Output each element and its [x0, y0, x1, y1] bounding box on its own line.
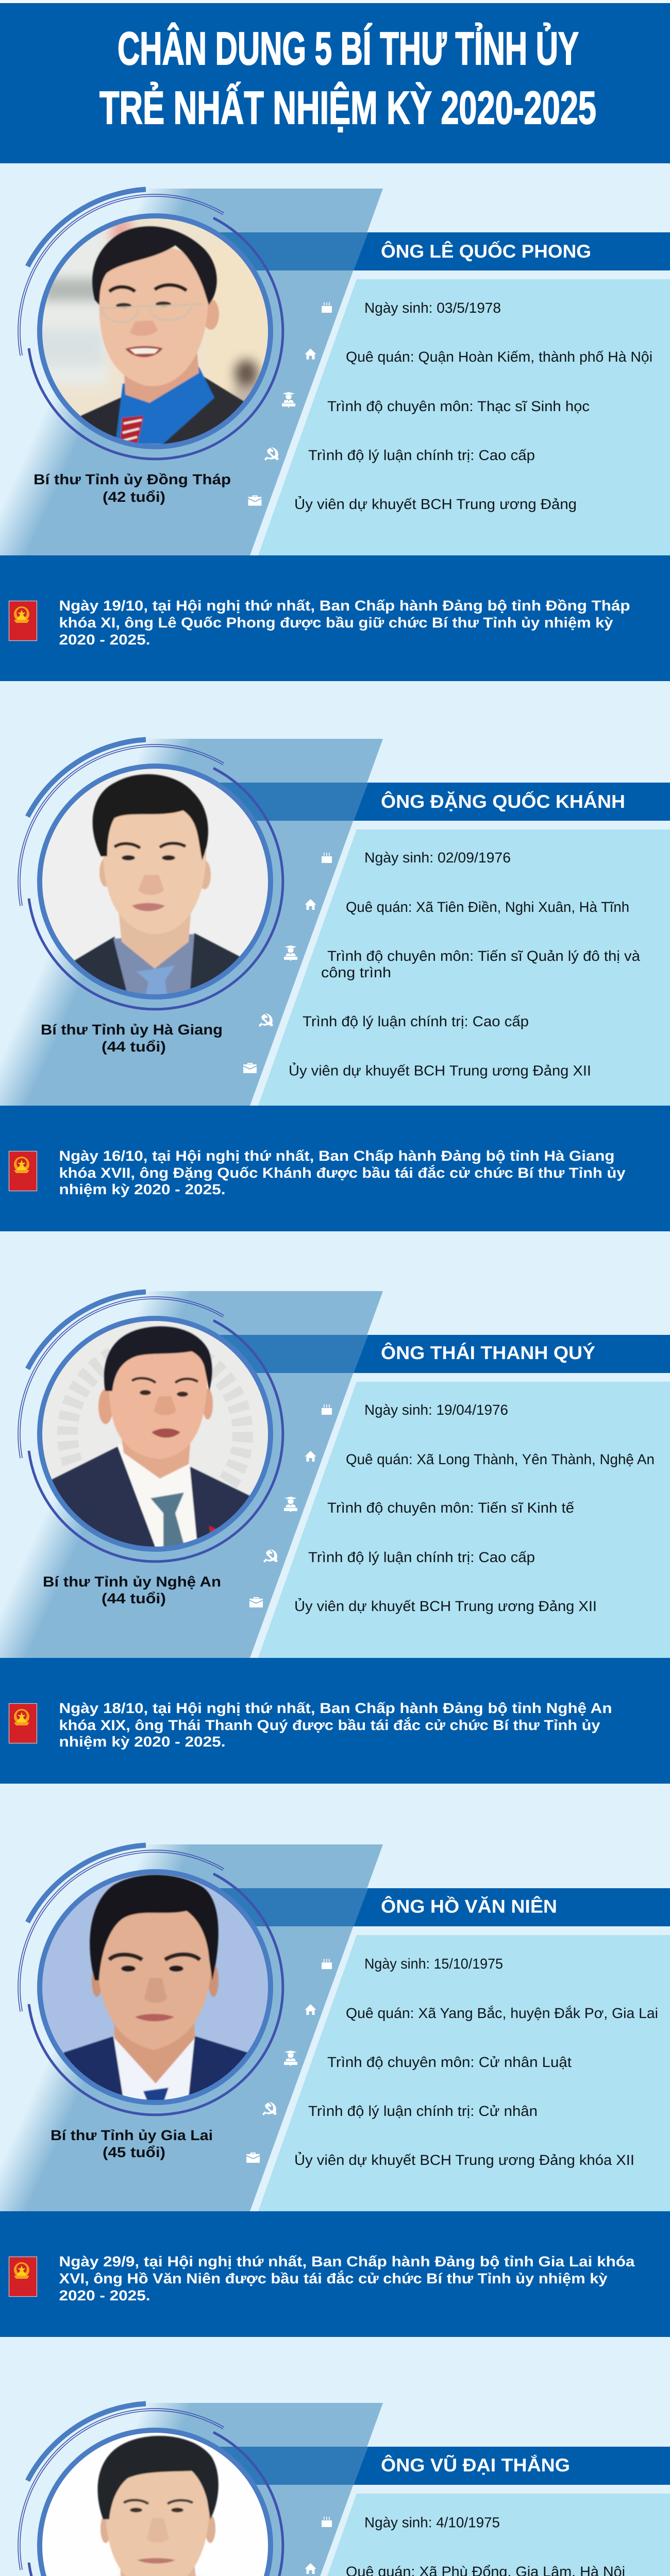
photo ring: [40, 1318, 271, 1549]
icon: briefcase: [246, 2153, 260, 2163]
portrait: Hồ Văn Niên: [41, 1872, 271, 2102]
section 2: Đặng Quốc Khánh: [0, 739, 670, 1231]
name: ÔNG VŨ ĐẠI THẮNG: [381, 2454, 570, 2476]
info panel: [258, 1382, 670, 1658]
note text: khóa XI, ông Lê Quốc Phong được bầu giữ chức Bí thư Tỉnh ủy nhiệm kỳ: [59, 615, 613, 631]
note text: nhiệm kỳ 2020 - 2025.: [59, 1181, 226, 1197]
name band: [354, 2447, 670, 2485]
icon: house: [305, 348, 316, 360]
name band overlay: [180, 232, 368, 270]
row: education: Trình độ chuyên môn: Tiến sĩ Quản lý đô thị và: [327, 948, 640, 964]
row: hometown: Quê quán: Xã Yang Bắc, huyện Đắk Pơ, Gia Lai: [346, 2005, 658, 2021]
icon: house: [305, 899, 316, 910]
decorative arcs: [18, 740, 283, 1009]
background trapezoid: [0, 1844, 383, 2211]
background trapezoid: [0, 739, 383, 1106]
note text: [59, 2253, 635, 2303]
portrait: Lê Quốc Phong: [36, 216, 271, 446]
row: birth date: Ngày sinh: 02/09/1976: [364, 850, 511, 866]
name band overlay: [180, 1335, 368, 1373]
caption: (44 tuổi): [102, 1590, 166, 1606]
section 3: Thái Thanh Quý: [0, 1291, 670, 1784]
name band: [354, 1335, 670, 1373]
row: education: [321, 948, 640, 980]
icon: cake: [322, 853, 332, 863]
row: hometown: Quê quán: Xã Long Thành, Yên Thành, Nghệ An: [346, 1451, 655, 1467]
decorative arcs: [18, 2404, 283, 2576]
background trapezoid: [0, 189, 383, 555]
name: ÔNG LÊ QUỐC PHONG: [381, 241, 591, 262]
row: birth date: Ngày sinh: 03/5/1978: [364, 300, 501, 316]
icon: cake: [322, 1959, 332, 1969]
note text: 2020 - 2025.: [59, 632, 150, 648]
icon: emblem flag: [9, 1151, 37, 1191]
icon: graduate: [284, 945, 297, 961]
row: committee: Ủy viên dự khuyết BCH Trung ương Đảng: [294, 496, 577, 512]
row: political theory: Trình độ lý luận chính trị: Cao cấp: [308, 1549, 535, 1565]
icon: graduate: [284, 1497, 297, 1512]
info panel: [258, 279, 670, 555]
caption: [34, 471, 231, 505]
note band: [0, 2211, 670, 2337]
background trapezoid: [0, 1291, 383, 1658]
caption: Bí thư Tỉnh ủy Đồng Tháp: [34, 471, 231, 487]
section 1: Lê Quốc Phong: [0, 189, 670, 681]
photo ring: [40, 1872, 271, 2103]
icon: house: [305, 2563, 316, 2574]
caption: [41, 1022, 223, 1055]
caption: Bí thư Tỉnh ủy Gia Lai: [51, 2127, 213, 2143]
icon: briefcase: [248, 496, 262, 506]
caption: (42 tuổi): [103, 489, 165, 505]
header band: [0, 0, 670, 163]
caption: (44 tuổi): [102, 1039, 166, 1055]
name: ÔNG HỒ VĂN NIÊN: [381, 1896, 557, 1917]
row: birth date: Ngày sinh: 19/04/1976: [364, 1402, 508, 1418]
row: committee: Ủy viên dự khuyết BCH Trung ương Đảng XII: [294, 1598, 597, 1614]
decorative arcs: [18, 1845, 283, 2115]
row: political theory: Trình độ lý luận chính trị: Cao cấp: [308, 447, 535, 463]
note text: [59, 598, 630, 648]
icon: graduate: [282, 392, 295, 408]
icon: emblem flag: [9, 2257, 37, 2297]
note text: Ngày 29/9, tại Hội nghị thứ nhất, Ban Chấp hành Đảng bộ tỉnh Gia Lai khóa: [59, 2253, 635, 2269]
row: birth date: Ngày sinh: 15/10/1975: [364, 1956, 503, 1972]
name band overlay: [180, 1888, 368, 1926]
icon: hammer and sickle: [259, 1013, 273, 1027]
row: education: Trình độ chuyên môn: Thạc sĩ Sinh học: [327, 398, 590, 414]
note text: XVI, ông Hồ Văn Niên được bầu tái đắc cử chức Bí thư Tỉnh ủy nhiệm kỳ: [59, 2270, 608, 2286]
icon: house: [305, 2004, 316, 2015]
note text: Ngày 18/10, tại Hội nghị thứ nhất, Ban Chấp hành Đảng bộ tỉnh Nghệ An: [59, 1700, 612, 1716]
decorative arcs: [18, 1292, 283, 1562]
photo ring: [40, 216, 271, 447]
name band: [354, 232, 670, 270]
caption: Bí thư Tỉnh ủy Hà Giang: [41, 1022, 223, 1038]
info panel: [258, 1935, 670, 2211]
row: education: công trình: [321, 964, 391, 980]
photo ring: [40, 766, 271, 997]
note band: [0, 1658, 670, 1784]
icon: cake: [322, 2517, 332, 2527]
row: birth date: Ngày sinh: 4/10/1975: [364, 2514, 500, 2531]
row: political theory: Trình độ lý luận chính trị: Cử nhân: [308, 2103, 538, 2119]
name band overlay: [180, 783, 368, 821]
row: education: Trình độ chuyên môn: Cử nhân Luật: [327, 2054, 572, 2070]
portrait: Vũ Đại Thắng: [41, 2431, 271, 2576]
caption: [43, 1573, 221, 1606]
caption: [51, 2127, 213, 2160]
name band: [354, 783, 670, 821]
note text: khóa XIX, ông Thái Thanh Quý được bầu tái đắc cử chức Bí thư Tỉnh ủy: [59, 1717, 600, 1733]
name band: [354, 1888, 670, 1926]
note text: 2020 - 2025.: [59, 2287, 150, 2303]
icon: cake: [322, 1404, 332, 1415]
icon: cake: [322, 302, 332, 313]
portrait: Đặng Quốc Khánh: [41, 767, 271, 996]
section 5: Vũ Đại Thắng: [0, 2403, 670, 2576]
background trapezoid: [0, 2403, 383, 2576]
icon: briefcase: [249, 1597, 263, 1607]
portrait: Thái Thanh Quý: [41, 1319, 271, 1548]
note text: [59, 1700, 612, 1750]
name: ÔNG ĐẶNG QUỐC KHÁNH: [381, 791, 625, 812]
row: committee: Ủy viên dự khuyết BCH Trung ương Đảng khóa XII: [294, 2151, 634, 2168]
row: education: Trình độ chuyên môn: Tiến sĩ Kinh tế: [327, 1500, 574, 1516]
row: committee: Ủy viên dự khuyết BCH Trung ương Đảng XII: [289, 1062, 591, 1079]
icon: briefcase: [243, 1063, 257, 1073]
note text: Ngày 16/10, tại Hội nghị thứ nhất, Ban Chấp hành Đảng bộ tỉnh Hà Giang: [59, 1148, 614, 1164]
row: hometown: Quê quán: Xã Tiên Điền, Nghi Xuân, Hà Tĩnh: [346, 899, 629, 915]
row: political theory: Trình độ lý luận chính trị: Cao cấp: [303, 1013, 529, 1029]
note text: nhiệm kỳ 2020 - 2025.: [59, 1734, 226, 1750]
icon: hammer and sickle: [264, 447, 279, 461]
info panel: [258, 2494, 670, 2576]
note band: [0, 1106, 670, 1231]
photo ring: [40, 2430, 271, 2576]
icon: hammer and sickle: [263, 1549, 278, 1563]
name band overlay: [180, 2447, 368, 2485]
caption: Bí thư Tỉnh ủy Nghệ An: [43, 1573, 221, 1590]
decorative arcs: [18, 190, 283, 459]
note text: khóa XVII, ông Đặng Quốc Khánh được bầu tái đắc cử chức Bí thư Tỉnh ủy: [59, 1165, 626, 1181]
icon: house: [305, 1451, 316, 1462]
icon: hammer and sickle: [262, 2102, 277, 2115]
note text: [59, 1148, 626, 1197]
info panel: [258, 829, 670, 1106]
row: hometown: Quê quán: Quận Hoàn Kiếm, thành phố Hà Nội: [346, 349, 652, 365]
icon: emblem flag: [9, 1703, 37, 1743]
note text: Ngày 19/10, tại Hội nghị thứ nhất, Ban Chấp hành Đảng bộ tỉnh Đồng Tháp: [59, 598, 630, 614]
caption: (45 tuổi): [103, 2144, 165, 2160]
section 4: Hồ Văn Niên: [0, 1844, 670, 2337]
icon: emblem flag: [9, 601, 37, 641]
name: ÔNG THÁI THANH QUÝ: [381, 1342, 595, 1363]
note band: [0, 555, 670, 681]
icon: graduate: [284, 2050, 297, 2066]
